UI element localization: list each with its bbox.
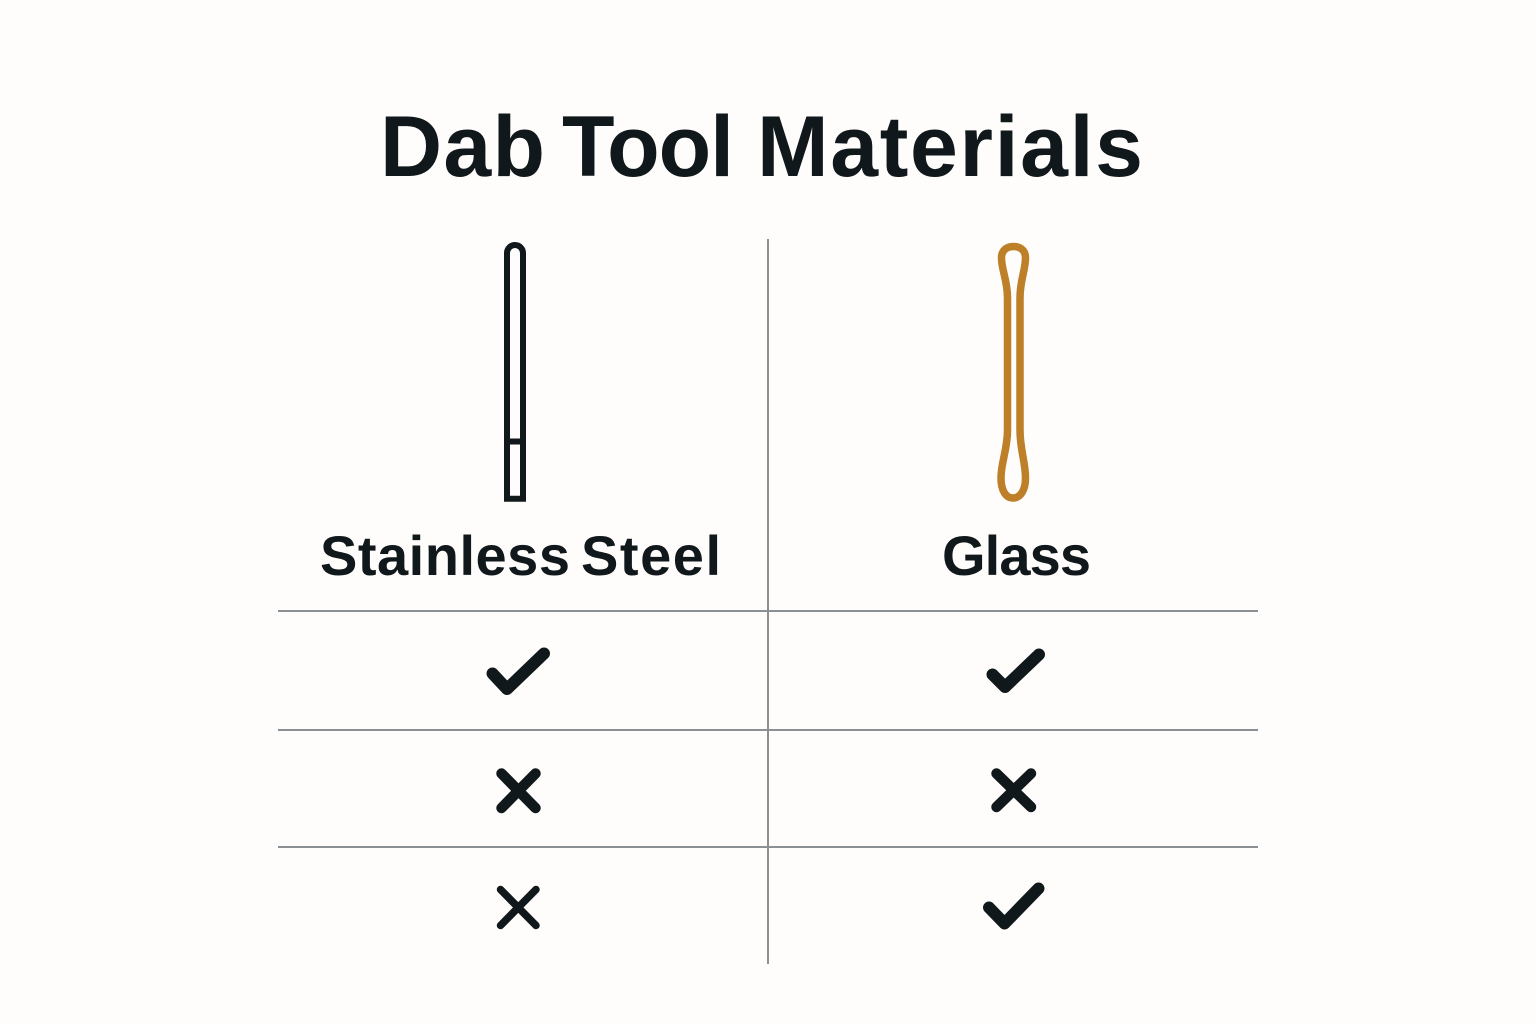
comparison table grid — [278, 239, 1258, 964]
column heading: Glass: Glass — [942, 524, 1091, 587]
icon: glass dab tool — [1001, 246, 1026, 498]
icon: stainless steel dab tool — [507, 245, 523, 499]
icon: cross, stainless steel row 3 — [500, 890, 536, 926]
icon: check, stainless steel row 1 — [492, 654, 544, 689]
icon: check, glass row 3 — [989, 888, 1038, 924]
icon: cross, glass row 2 — [996, 774, 1031, 807]
icon: cross, stainless steel row 2 — [502, 774, 536, 808]
icon: check, glass row 1 — [992, 654, 1039, 687]
title — [380, 99, 1143, 195]
title: Tool — [562, 99, 734, 195]
column heading: Stainless Steel: Steel — [581, 524, 721, 587]
column heading: Stainless Steel: Stainless — [320, 524, 570, 587]
column heading: Stainless Steel — [320, 524, 721, 587]
title: Materials — [757, 99, 1143, 195]
title: Dab — [380, 99, 545, 195]
